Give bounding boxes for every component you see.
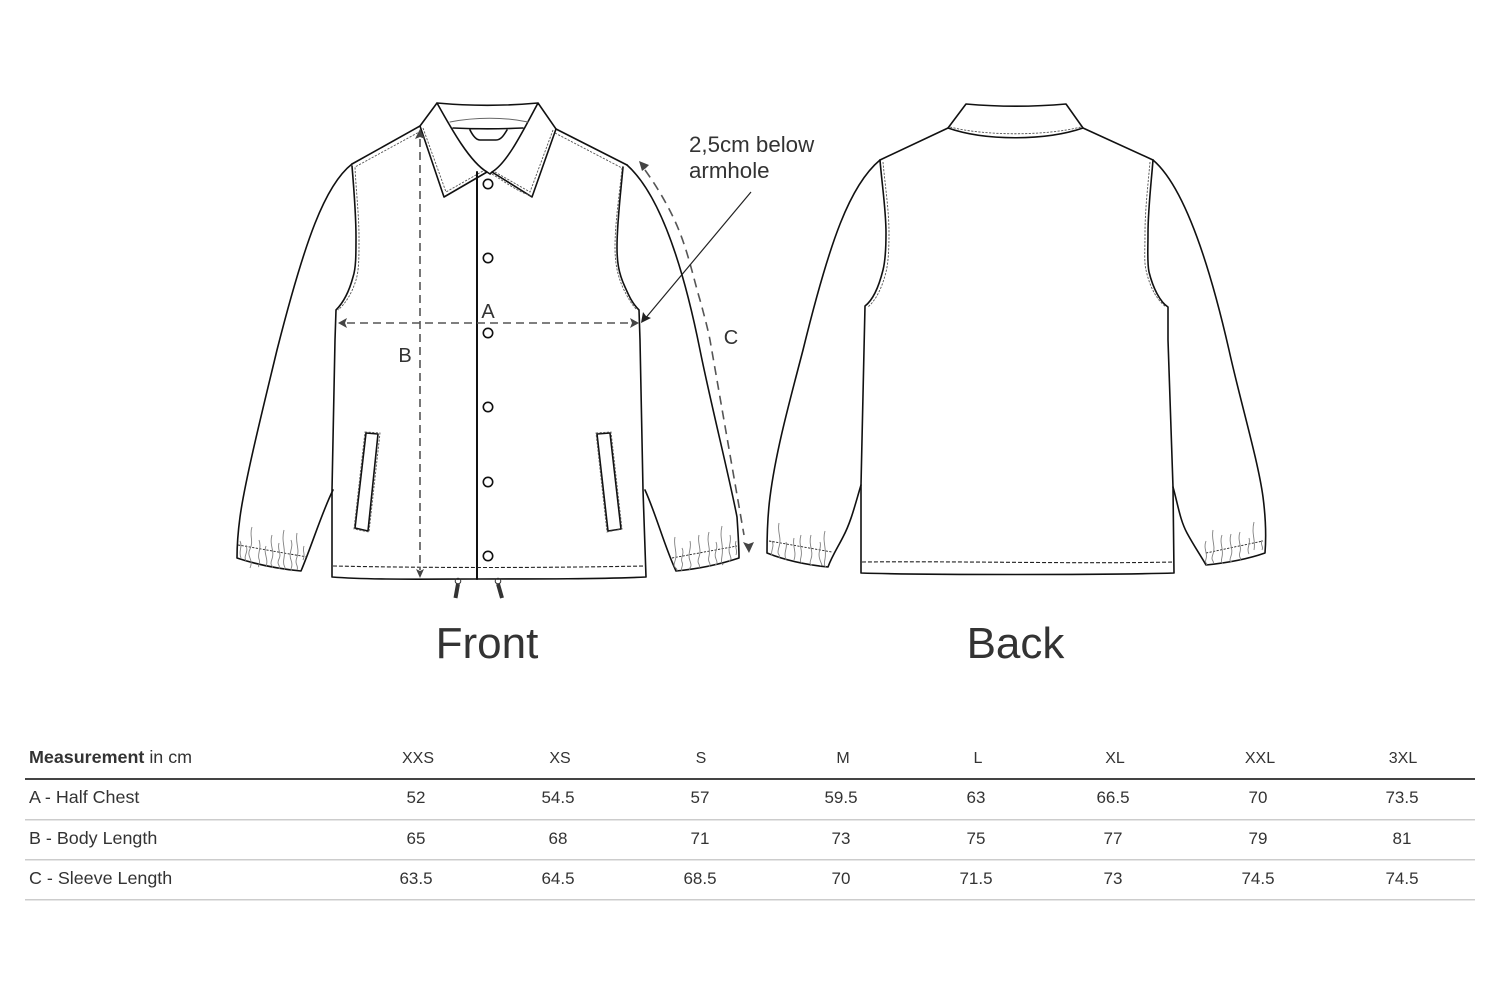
back left cuff gathers — [769, 523, 832, 567]
collar — [420, 103, 556, 197]
neck band and label — [453, 128, 523, 140]
front jacket illustration — [237, 103, 739, 598]
table header row: L — [974, 750, 983, 767]
back armhole stitching — [868, 162, 1166, 307]
row A: half chest: 59.5 — [824, 788, 858, 807]
row B: body length: 68 — [549, 829, 567, 848]
back jacket illustration — [767, 104, 1266, 574]
table header row: 3XL — [1389, 750, 1417, 767]
heading: Back: Back — [967, 619, 1065, 668]
arrow C lower head — [743, 542, 754, 553]
hem stitching — [333, 566, 645, 568]
drawstrings — [455, 578, 502, 598]
row B: body length: 73 — [832, 829, 850, 848]
back body outline — [861, 160, 1174, 574]
row B: body length: B - Body Length — [29, 828, 157, 848]
arrow B: body length — [415, 129, 425, 578]
measurement letter A: A — [481, 301, 495, 323]
row B: body length: 65 — [407, 829, 425, 848]
measurement letter B: B — [398, 345, 412, 367]
row C: sleeve length: 73 — [1104, 869, 1122, 888]
back shoulders — [880, 128, 1153, 160]
table rules — [25, 778, 1475, 900]
row C: sleeve length: 64.5 — [541, 869, 575, 888]
front placket — [476, 172, 478, 579]
left pocket — [354, 432, 380, 532]
row A: half chest: 54.5 — [541, 788, 575, 807]
back right cuff gathers — [1205, 522, 1263, 565]
row A: half chest: A - Half Chest — [29, 787, 139, 807]
callout text: 2,5cm below — [689, 132, 815, 157]
callout text second line: armhole — [689, 158, 770, 183]
arrow A: half chest — [338, 318, 639, 328]
back collar — [948, 104, 1083, 138]
row B: body length: 75 — [967, 829, 985, 848]
right pocket — [596, 432, 622, 532]
table header row — [29, 747, 1417, 767]
row A: half chest: 63 — [967, 788, 985, 807]
row C: sleeve length: 68.5 — [683, 869, 717, 888]
front right sleeve — [627, 165, 739, 571]
shoulder seams — [352, 126, 627, 165]
table header row: XXS — [402, 750, 434, 767]
back left sleeve — [767, 160, 880, 567]
table header row: XXL — [1245, 750, 1275, 767]
heading: Front: Front — [436, 619, 538, 668]
table header row: S — [696, 750, 706, 767]
row C: sleeve length: C - Sleeve Length — [29, 868, 172, 888]
callout leader arrow — [641, 192, 751, 323]
right cuff gathers — [672, 526, 737, 571]
row A: half chest — [29, 787, 1419, 807]
row B: body length: 71 — [691, 829, 709, 848]
left cuff gathers — [238, 527, 307, 571]
back right sleeve — [1153, 160, 1266, 565]
table header row: M — [836, 750, 850, 767]
back hem stitching — [862, 561, 1174, 564]
measurement letter C: C — [724, 327, 738, 349]
size table — [25, 747, 1475, 900]
row A: half chest: 57 — [691, 788, 709, 807]
front body outline — [332, 166, 646, 579]
row C: sleeve length: 70 — [832, 869, 850, 888]
row A: half chest: 52 — [407, 788, 425, 807]
row C: sleeve length: 74.5 — [1385, 869, 1419, 888]
row C: sleeve length: 74.5 — [1241, 869, 1275, 888]
row A: half chest: 70 — [1249, 788, 1267, 807]
row B: body length: 77 — [1104, 829, 1122, 848]
front left sleeve — [237, 164, 352, 571]
snap buttons — [483, 179, 493, 561]
row A: half chest: 66.5 — [1096, 788, 1130, 807]
arrow C: sleeve length — [639, 161, 754, 553]
row C: sleeve length — [29, 868, 1419, 888]
row B: body length — [29, 828, 1411, 848]
row B: body length: 79 — [1249, 829, 1267, 848]
row B: body length: 81 — [1393, 829, 1411, 848]
row A: half chest: 73.5 — [1385, 788, 1419, 807]
row C: sleeve length: 71.5 — [959, 869, 993, 888]
table header row: XL — [1105, 750, 1125, 767]
table header row: Measurement in cm — [29, 747, 192, 767]
table header row: XS — [549, 750, 571, 767]
row C: sleeve length: 63.5 — [399, 869, 433, 888]
